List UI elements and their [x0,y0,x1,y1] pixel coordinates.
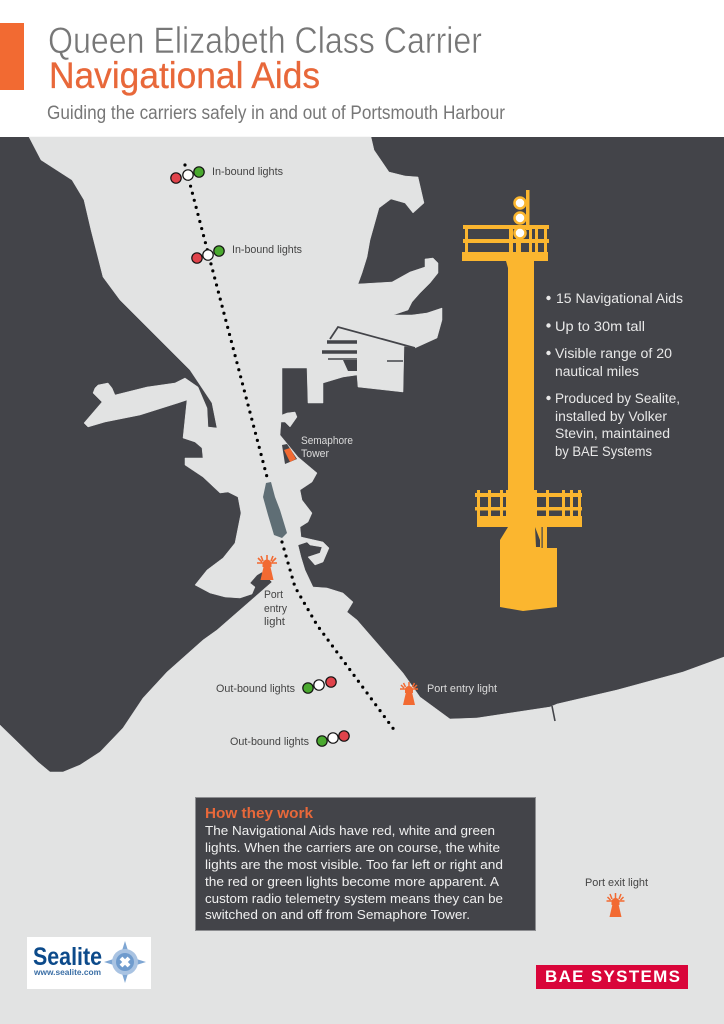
panel body text: lights are the most visible. Too far left or right and [205,857,503,872]
in-bound lights 1 [171,166,283,183]
title line 1: Queen Elizabeth Class Carrier [48,20,482,61]
out-bound lights 2: Out-bound lights [230,736,309,748]
tower facts list: Produced by Sealite, [555,391,680,406]
panel: how they work [196,798,536,930]
icon: navigational aid tower [462,190,582,611]
in-bound lights 2: In-bound lights [232,244,302,256]
icon: port entry light east [400,682,418,705]
panel body text: lights. When the carriers are on course, the white [205,840,500,855]
panel heading: How they work [205,806,314,822]
out-bound lights 1: Out-bound lights [216,683,295,695]
out-bound lights 1 [216,677,336,695]
dockyard jetties [322,327,555,721]
logo url: www.sealite.com [33,968,101,977]
tower facts list: Visible range of 20 [555,346,672,361]
tower facts list: installed by Volker [555,409,668,424]
header accent block [0,23,24,90]
subtitle: Guiding the carriers safely in and out of Portsmouth Harbour [47,103,506,124]
logo compass [104,941,146,983]
tower facts list: nautical miles [555,364,639,379]
panel body text: custom radio telemetry system means they can be [205,891,503,906]
in-bound lights 2 [192,244,302,263]
dotted course line upper [185,165,267,477]
label: semaphore tower: Tower [301,448,329,460]
tower facts list: by BAE Systems [555,444,652,459]
label: semaphore tower: Semaphore [301,435,353,447]
tower facts list: Up to 30m tall [555,319,645,334]
title [47,20,506,124]
tower detail slits [535,527,543,548]
tower facts list: 15 Navigational Aids [556,291,683,306]
label: port entry light east: Port entry light [427,683,497,695]
label: port entry light vertical: entry [264,603,287,615]
icon: semaphore tower [284,448,296,462]
out-bound lights 2 [230,731,349,748]
icon: port exit light [606,893,624,917]
panel body text [205,823,503,922]
tower lights [514,198,526,238]
panel body text: the red or green lights become more apparent. A [205,874,499,889]
carrier ship [263,482,287,538]
label: port exit light: Port exit light [585,877,648,889]
label: port entry light vertical: light [264,616,285,628]
label: port entry light vertical: Port [264,589,283,601]
in-bound lights 1: In-bound lights [212,166,283,178]
semaphore island [282,444,297,464]
icon: port entry light on harbour mouth [257,555,277,580]
panel body text: switched on and off from Semaphore Tower. [205,907,470,922]
dotted course line lower [282,542,395,731]
panel body text: The Navigational Aids have red, white and green [205,823,495,838]
tower facts list: Stevin, maintained [555,426,670,441]
logo wordmark: Sealite [33,943,102,971]
logo: Sealite [27,937,151,989]
logo: BAE Systems: BAE SYSTEMS [545,967,680,986]
tower facts list [546,291,683,459]
title line 2: Navigational Aids [49,55,320,96]
tower body [462,190,582,611]
